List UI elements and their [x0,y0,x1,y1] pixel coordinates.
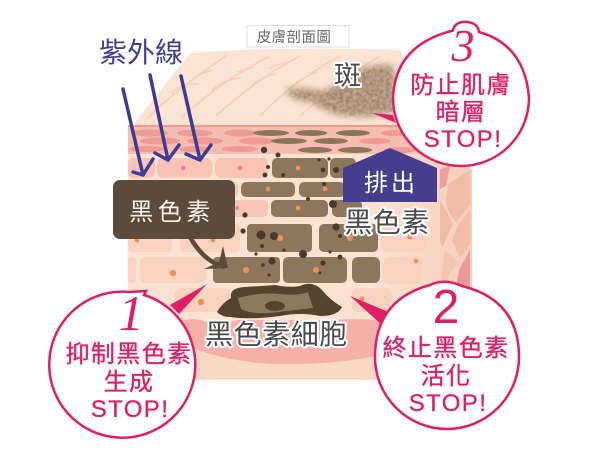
melanocyte label: 黑色素細胞 [205,319,348,350]
callout 2: 活化 [421,363,471,390]
dark spot on skin surface [285,65,396,117]
spot label: 斑 [334,61,361,91]
UV label: 紫外線 [99,37,183,68]
callout 2: STOP! [409,390,487,417]
callout 2 [350,281,519,429]
callout 1: 1 [118,285,144,341]
caption box: 皮膚剖面圖 [257,29,331,46]
melanin excreted label: 黑色素 [344,207,430,238]
curved arrow from melanin box [190,237,228,269]
top skin surface [133,49,440,125]
epidermis pink band [128,125,440,154]
dermis background [128,154,440,380]
callout 1: 生成 [104,369,154,396]
skin cross-section block [128,49,472,380]
callout 3 [372,20,529,166]
excretion house arrow [343,148,437,202]
callout 1: 抑制黑色素 [66,341,192,368]
callout 3: STOP! [424,126,502,153]
basal pink band [170,319,395,364]
callout 3: 防止肌膚 [410,72,512,99]
right side face [395,52,472,380]
melanin label box [113,180,235,239]
excretion house arrow: 排出 [364,170,418,197]
lower layer [170,338,395,380]
melanocyte cell [217,284,342,318]
callout 1: STOP! [91,396,169,423]
UV arrows [123,75,211,175]
callout 2: 終止黑色素 [382,335,510,362]
callout 1 [49,284,207,438]
callout 2: 2 [433,281,459,334]
melanin granules [240,147,342,277]
callout 3: 暗層 [436,99,486,126]
melanin label box: 黑色素 [129,199,215,226]
skin cell bricks [128,158,427,312]
callout 3: 3 [450,20,474,71]
caption box [247,26,349,47]
